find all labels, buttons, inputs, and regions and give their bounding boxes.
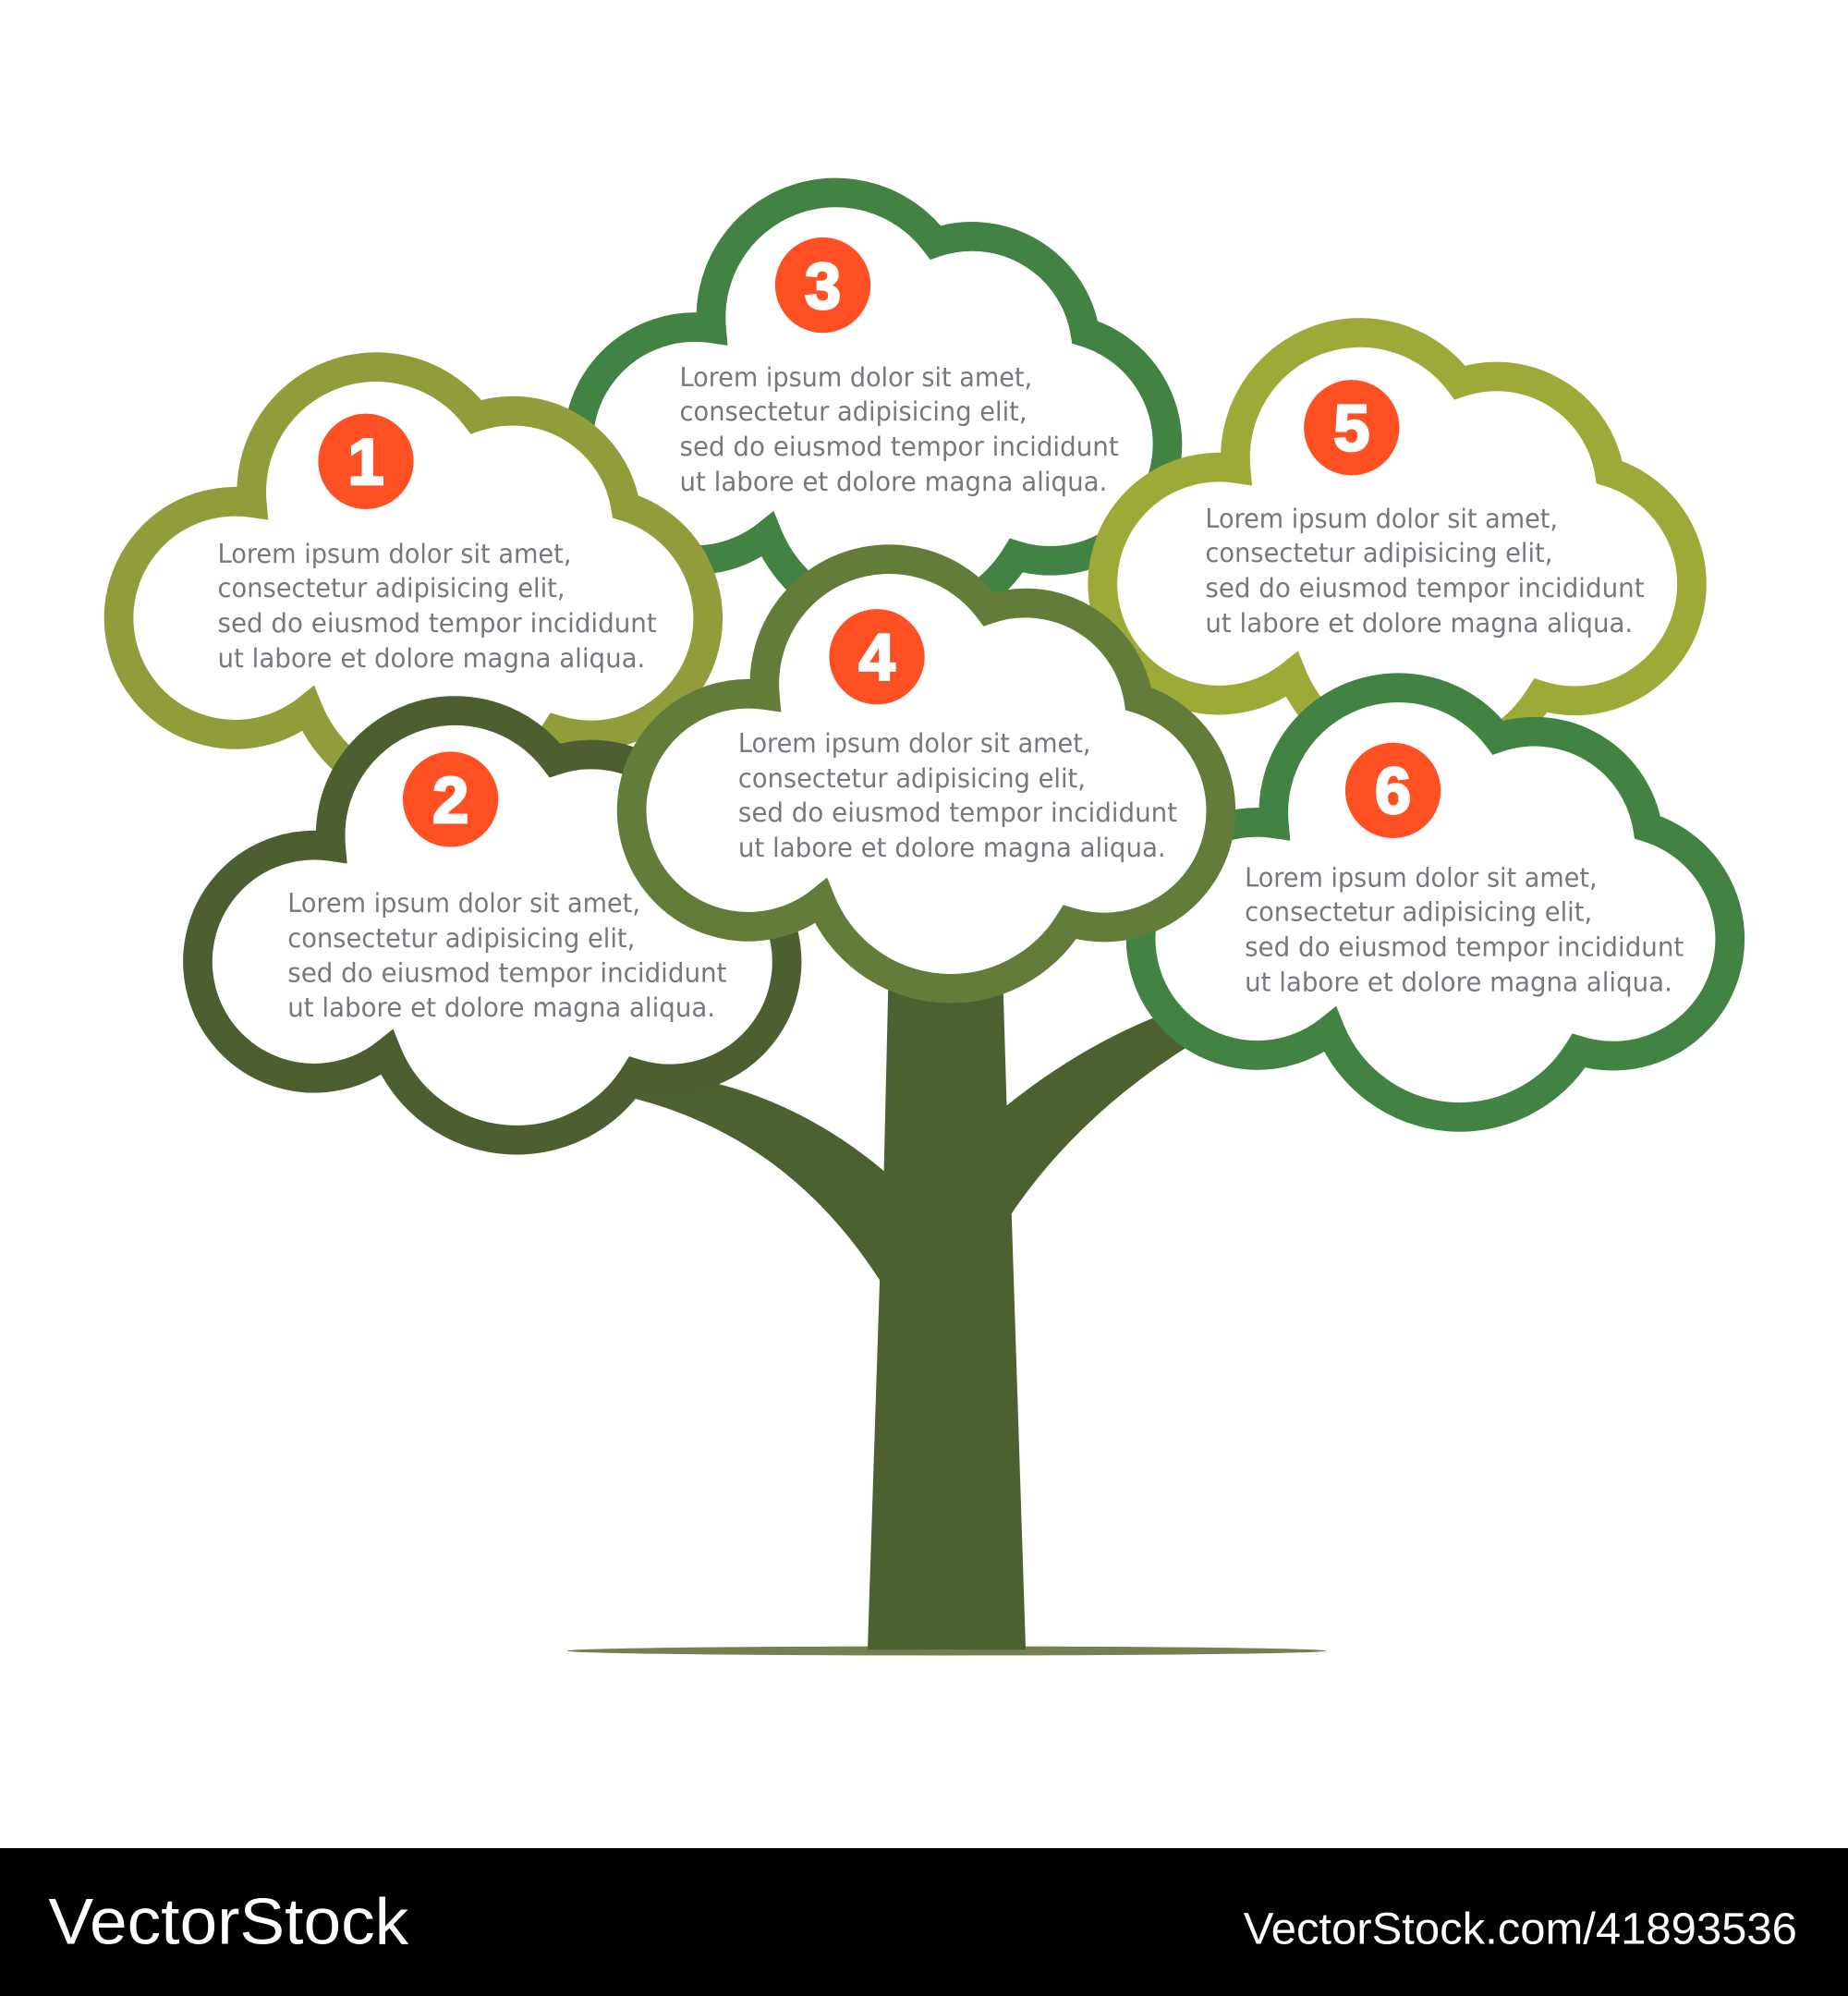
- number badge 4: [829, 609, 925, 704]
- cloud 1: [119, 367, 708, 797]
- text block 2: ut labore et dolore magna aliqua.: [287, 992, 715, 1023]
- text block 4: sed do eiusmod tempor incididunt: [738, 797, 1177, 828]
- number badge 6: [1345, 743, 1441, 838]
- number badge 5: [1304, 380, 1399, 475]
- tree trunk and branches: [611, 980, 1203, 1649]
- number badge 2: 2: [432, 763, 468, 836]
- text block 1: ut labore et dolore magna aliqua.: [218, 643, 645, 674]
- text block 5: consectetur adipisicing elit,: [1205, 538, 1552, 568]
- text block 5: Lorem ipsum dolor sit amet,: [1205, 504, 1558, 534]
- number badge 1: [318, 414, 414, 509]
- text block 6: ut labore et dolore magna aliqua.: [1245, 967, 1672, 997]
- number badge 3: 3: [805, 249, 841, 322]
- text block 6: [1245, 862, 1684, 997]
- watermark url text: VectorStock.com/41893536: [1244, 1904, 1797, 1953]
- cloud 3: [578, 192, 1167, 622]
- text block 3: sed do eiusmod tempor incididunt: [680, 432, 1119, 462]
- ground shadow: [567, 1647, 1326, 1655]
- text block 2: consectetur adipisicing elit,: [287, 923, 635, 954]
- text block 5: ut labore et dolore magna aliqua.: [1205, 608, 1633, 639]
- text block 1: sed do eiusmod tempor incididunt: [218, 608, 657, 639]
- text block 1: Lorem ipsum dolor sit amet,: [218, 539, 571, 569]
- number badge 6: 6: [1375, 754, 1411, 827]
- text block 4: Lorem ipsum dolor sit amet,: [738, 728, 1090, 759]
- text block 3: [680, 362, 1119, 497]
- watermark band: [0, 1848, 1848, 1996]
- text block 2: Lorem ipsum dolor sit amet,: [287, 888, 640, 919]
- number badge 5: 5: [1333, 392, 1369, 465]
- text block 1: consectetur adipisicing elit,: [218, 573, 565, 603]
- text block 4: consectetur adipisicing elit,: [738, 763, 1086, 794]
- text block 3: Lorem ipsum dolor sit amet,: [680, 362, 1032, 393]
- text block 6: sed do eiusmod tempor incididunt: [1245, 931, 1684, 962]
- text block 6: consectetur adipisicing elit,: [1245, 897, 1592, 928]
- text block 4: [738, 728, 1177, 863]
- cloud 6: [1141, 688, 1730, 1117]
- text block 2: sed do eiusmod tempor incididunt: [287, 958, 727, 989]
- number badge 3: [775, 237, 870, 333]
- text block 3: ut labore et dolore magna aliqua.: [680, 467, 1107, 497]
- text block 5: [1205, 504, 1645, 639]
- cloud 5: [1102, 333, 1692, 762]
- text block 2: [287, 888, 727, 1023]
- text block 6: Lorem ipsum dolor sit amet,: [1245, 862, 1598, 893]
- text block 1: [218, 539, 657, 674]
- text block 4: ut labore et dolore magna aliqua.: [738, 833, 1166, 863]
- cloud 4: [632, 559, 1221, 989]
- watermark logo text: VectorStock: [48, 1884, 409, 1957]
- number badge 4: 4: [859, 621, 895, 694]
- text block 3: consectetur adipisicing elit,: [680, 396, 1027, 427]
- cloud 2: [198, 711, 787, 1140]
- number badge 1: 1: [347, 425, 384, 498]
- number badge 2: [403, 751, 498, 847]
- text block 5: sed do eiusmod tempor incididunt: [1205, 573, 1645, 603]
